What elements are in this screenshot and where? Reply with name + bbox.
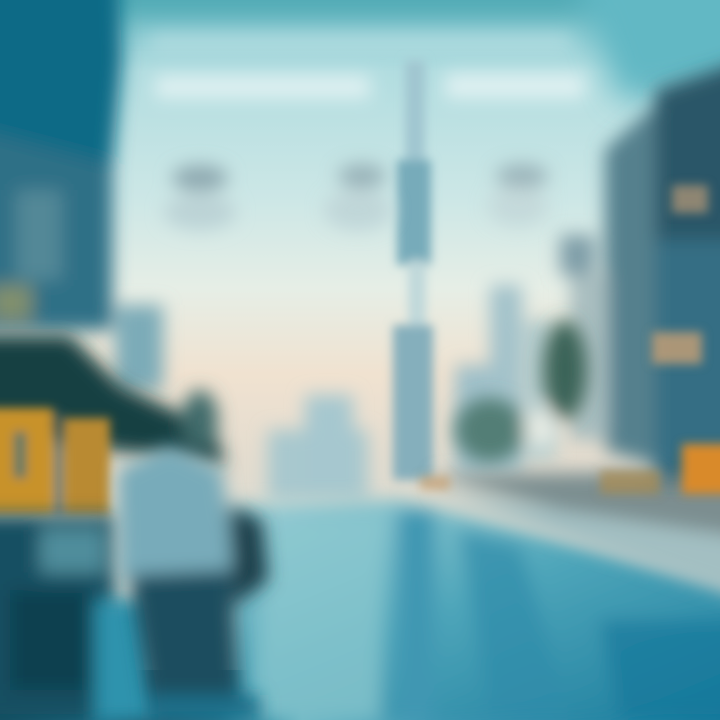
icon: left blurred	[164, 165, 236, 230]
title text area (blurred)	[150, 32, 585, 98]
distant skyline	[268, 285, 555, 500]
icon: centre blurred	[324, 164, 392, 230]
orange signs left	[0, 408, 110, 516]
buildings right	[560, 55, 720, 480]
icon: right blurred	[488, 164, 548, 226]
sky top band	[100, 0, 720, 100]
central tower	[393, 60, 433, 480]
bottom ground base	[0, 670, 720, 720]
water	[230, 500, 720, 720]
promenade right	[430, 470, 720, 605]
orange lights right	[420, 185, 720, 494]
trees left	[0, 335, 225, 465]
trees right	[455, 320, 587, 462]
buildings left	[0, 0, 163, 390]
person in foreground	[118, 445, 268, 720]
lower left street	[0, 515, 155, 720]
